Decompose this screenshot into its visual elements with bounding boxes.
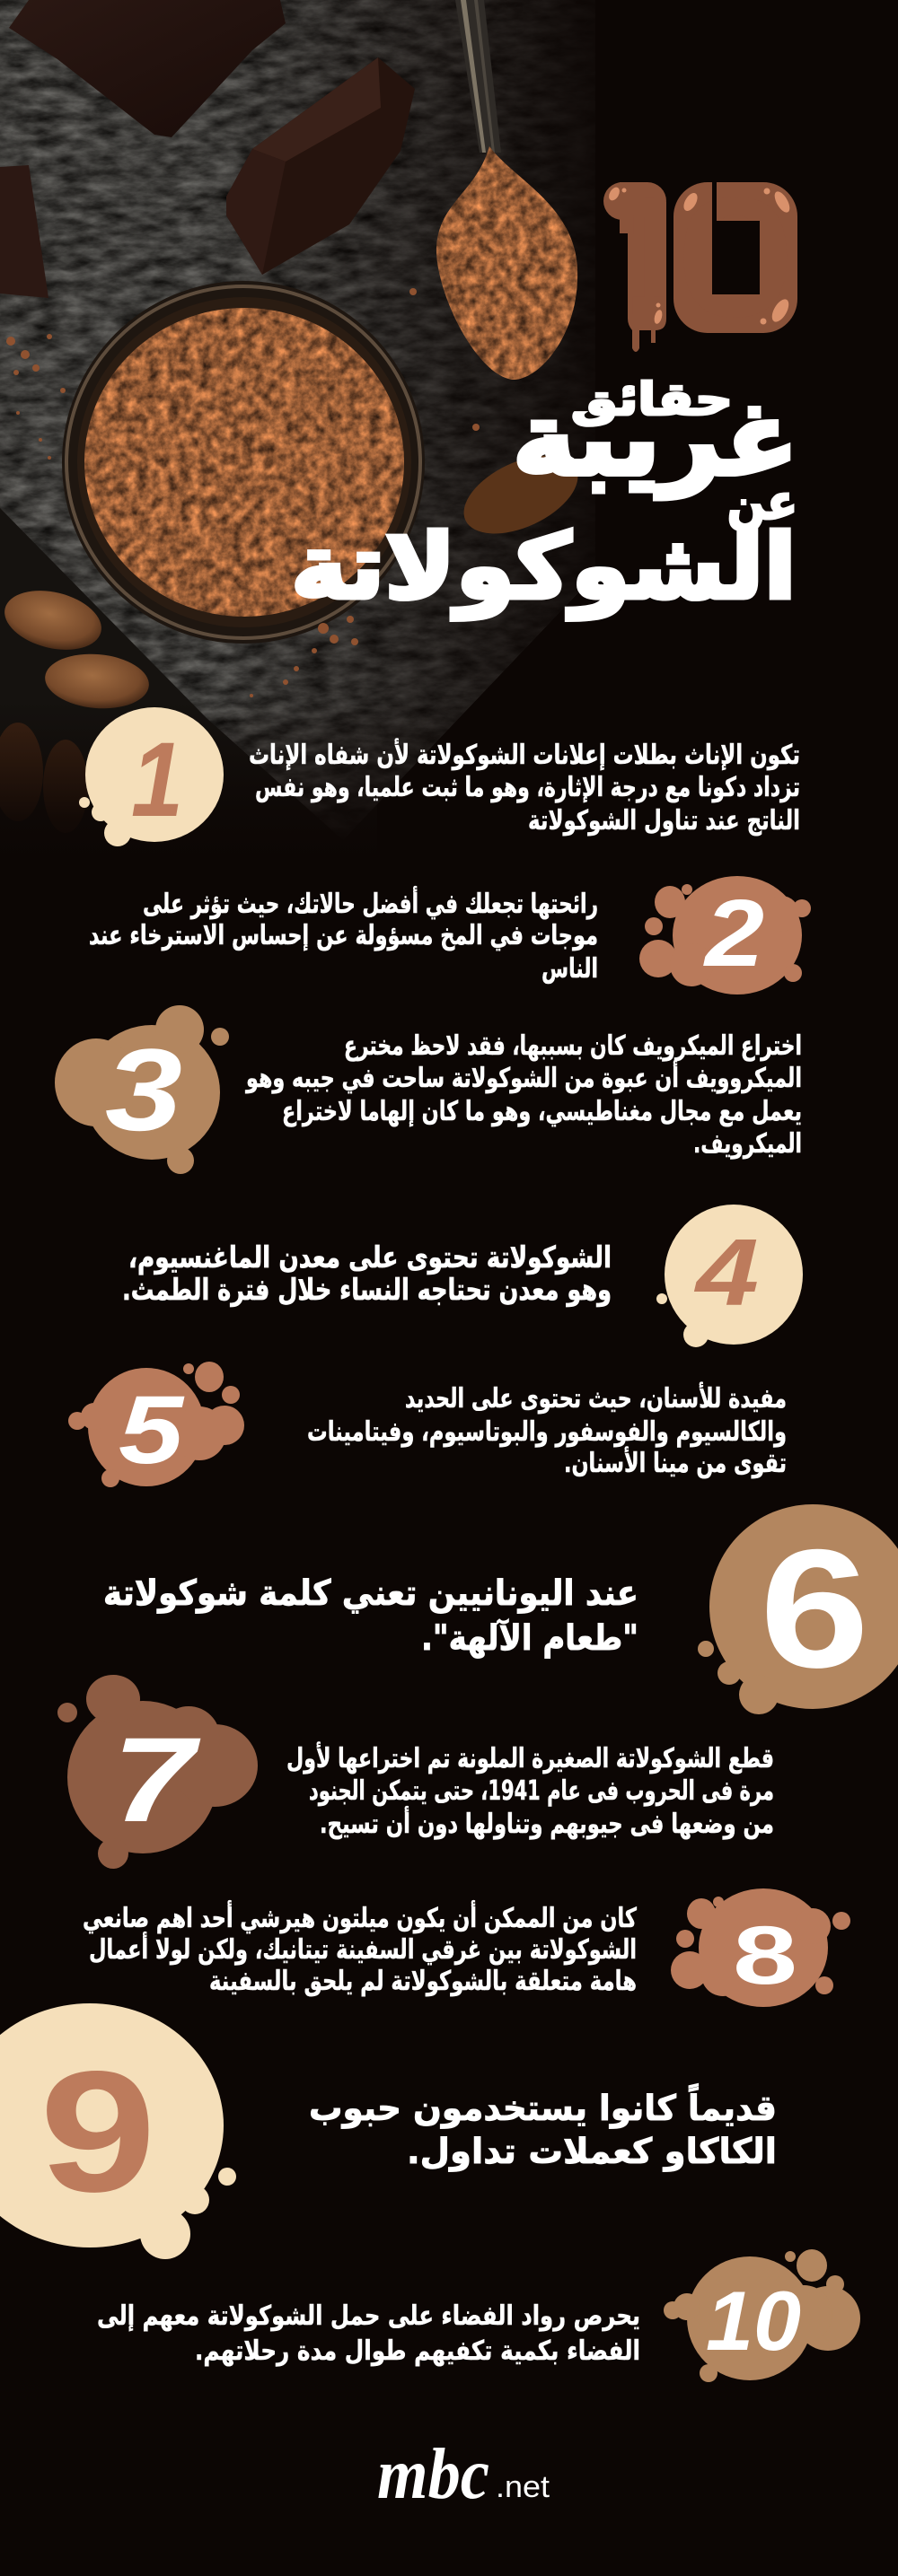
blob 8 (671, 1888, 850, 2007)
blob 9 (0, 2003, 236, 2259)
fact 6 (103, 1504, 898, 1714)
title line 1: حقائق (571, 373, 733, 426)
title line 2: غريبة (513, 381, 798, 498)
chocolate piece top (9, 0, 286, 137)
digit 0 block (674, 182, 797, 333)
fact 1 text: الناتج عند تناول الشوكولاتة (528, 805, 800, 837)
number 10 in chocolate (603, 161, 797, 353)
fact 5 (68, 1362, 787, 1487)
numeral 10: 10 (706, 2274, 801, 2368)
fact 10 text: الفضاء بكمية تكفيهم طوال مدة رحلاتهم. (195, 2335, 640, 2367)
fact 3 text (245, 1030, 802, 1160)
numeral 5: 5 (119, 1375, 185, 1484)
fact 4 text: الشوكولاتة تحتوى على معدن الماغنسيوم، (128, 1240, 612, 1275)
numeral 7: 7 (112, 1713, 201, 1847)
fact 8 text: هامة متعلقة بالشوكولاتة لم يلحق بالسفينة (209, 1966, 637, 1997)
wooden table (0, 485, 377, 871)
bowl of cocoa powder (81, 305, 409, 619)
fact 5 text: تقوى من مينا الأسنان. (564, 1446, 787, 1479)
logo suffix: .net (496, 2470, 550, 2504)
fact 10 text: يحرص رواد الفضاء على حمل الشوكولاتة معهم إلى (97, 2300, 640, 2332)
numeral 4: 4 (694, 1220, 759, 1326)
chocolate highlights (607, 186, 793, 325)
title (291, 373, 798, 620)
fact 4 text: وهو معدن تحتاجه النساء خلال فترة الطمث. (122, 1272, 612, 1308)
numeral 8: 8 (733, 1910, 797, 2002)
fact 9 text (309, 2082, 777, 2172)
fact 8 (83, 1888, 850, 2007)
blob 5 (68, 1362, 244, 1487)
fact 4 (122, 1205, 803, 1347)
fact 8 text: كان من الممكن أن يكون ميلتون هيرشي أحد اهم صانعي (83, 1900, 637, 1934)
numeral 2: 2 (703, 881, 764, 986)
header photo: cocoa powder, chocolate and beans on slate (0, 0, 589, 826)
fact 8 text (83, 1900, 637, 1997)
blob 4 (656, 1205, 803, 1347)
blob 6 (698, 1504, 898, 1714)
blob 2 (639, 876, 811, 994)
blob 7 (57, 1675, 258, 1869)
title line 4: الشوكولاتة (291, 514, 797, 620)
fact 6 text: عند اليونانيين تعني كلمة شوكولاتة (103, 1573, 638, 1614)
faded beans (0, 723, 88, 833)
chocolate piece middle (226, 57, 415, 275)
fade to background (0, 700, 629, 898)
slate board (0, 0, 595, 844)
digit 1 block (603, 182, 666, 352)
fact 2 text: رائحتها تجعلك في أفضل حالاتك، حيث تؤثر على (143, 886, 598, 920)
right edge shade (595, 0, 898, 718)
beans left (0, 582, 151, 713)
fact 1 (79, 707, 800, 846)
fact 5 text (307, 1381, 787, 1479)
number 10 in chocolate: 1 (629, 161, 666, 351)
fact 4 text (122, 1240, 612, 1308)
numeral 9: 9 (40, 2035, 156, 2228)
fact 2 text (89, 886, 598, 985)
fact 9 text: الكاكاو كعملات تداول. (407, 2132, 777, 2172)
spilled cocoa crumbs (6, 288, 480, 697)
cocoa bean beside title (452, 440, 590, 549)
numeral 6: 6 (760, 1514, 869, 1703)
fact 2 text: الناس (541, 953, 598, 985)
fact 3 text: الميكرويف. (693, 1128, 802, 1160)
blob 10 (664, 2249, 860, 2382)
numeral 1: 1 (131, 721, 183, 839)
spoon with cocoa powder (436, 146, 578, 380)
bowl rim (62, 281, 425, 644)
fact 6 text (103, 1573, 638, 1659)
fact 3 (55, 1005, 802, 1174)
fact 7 text (286, 1741, 774, 1840)
title line 3: عن (727, 474, 797, 530)
logo (377, 2435, 550, 2514)
logo wordmark: mbc (377, 2435, 489, 2514)
fact 8 text: الشوكولاتة بين غرقي السفينة تيتانيك، ولكن لولا أعمال (89, 1932, 637, 1966)
fact 6 text: "طعام الآلهة". (421, 1618, 638, 1659)
fact 2 (89, 876, 811, 994)
fact 7 text: مرة فى الحروب فى عام 1941، حتى يتمكن الجنود (309, 1775, 774, 1807)
blob 3 (55, 1005, 229, 1174)
fact 9 text: قديماً كانوا يستخدمون حبوب (309, 2082, 777, 2129)
bowl inside (77, 297, 411, 627)
fact 7 (57, 1675, 774, 1869)
numeral 3: 3 (105, 1024, 182, 1155)
digit 0 opening (712, 182, 760, 294)
fact 9 (0, 2003, 777, 2259)
fact 10 text (97, 2300, 640, 2367)
fact 2 text: موجات في المخ مسؤولة عن إحساس الاسترخاء عند (89, 920, 598, 951)
chocolate piece left (0, 165, 48, 298)
blob 1 (79, 707, 224, 846)
digit 0: 0 (675, 162, 796, 353)
fact 10 (97, 2249, 860, 2382)
spoon handle (455, 0, 501, 153)
fact 1 text (249, 738, 800, 837)
